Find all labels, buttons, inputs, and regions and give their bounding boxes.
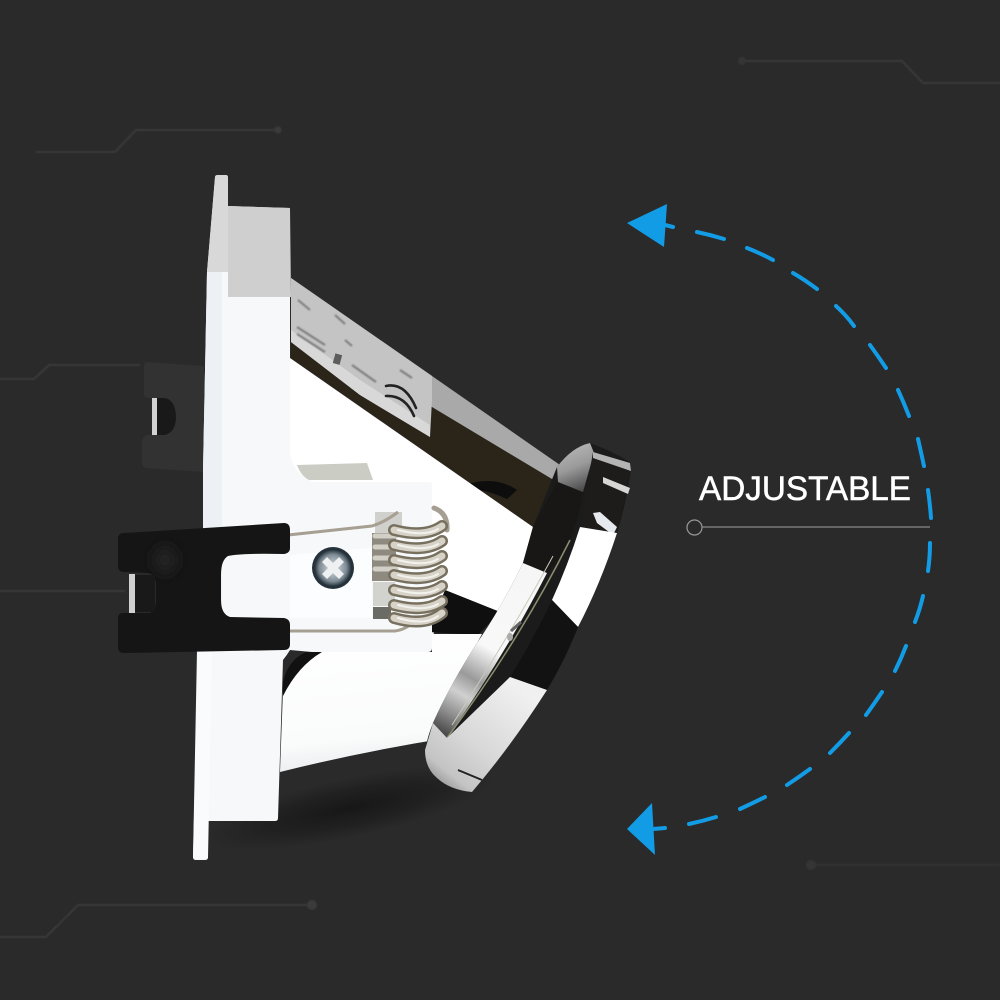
- lower white tab: [290, 548, 372, 618]
- ring white outer face: [552, 527, 617, 627]
- lower black clip: [118, 523, 290, 653]
- white mounting plate: [193, 175, 432, 860]
- ring top grey face: [557, 443, 594, 492]
- ring dark outer face: [510, 600, 578, 690]
- spring coil: [394, 508, 447, 622]
- interior white reflection: [290, 358, 533, 640]
- callout line with circle: [687, 520, 930, 535]
- spring wire arms: [288, 512, 410, 631]
- arrowhead bottom: [627, 803, 655, 855]
- drop shadow under lamp: [197, 747, 503, 869]
- ring lower chrome: [425, 677, 547, 792]
- cone dark wedge: [283, 652, 322, 696]
- upper black clip: [142, 362, 204, 472]
- ring silhouette: [425, 443, 631, 792]
- ring light inner strip: [433, 563, 547, 738]
- chrome barrel: dark band behind label: [291, 278, 560, 527]
- grey socket tab: [297, 463, 373, 480]
- curved dashed arrow: [627, 204, 931, 855]
- black blob inside chrome: [428, 590, 500, 635]
- product label sticker: [291, 278, 432, 437]
- lens chrome ring: [425, 443, 631, 792]
- bracket slot and spring back coils: [372, 512, 402, 619]
- ring top dark face: [580, 452, 631, 533]
- product: adjustable downlight fitting: [118, 175, 631, 860]
- screw: [312, 547, 354, 589]
- white cone lower body: [280, 634, 482, 772]
- ring inner dark section: [523, 482, 583, 573]
- arrowhead top: [627, 204, 667, 247]
- adjustable heading: ADJUSTABLE: [699, 470, 911, 508]
